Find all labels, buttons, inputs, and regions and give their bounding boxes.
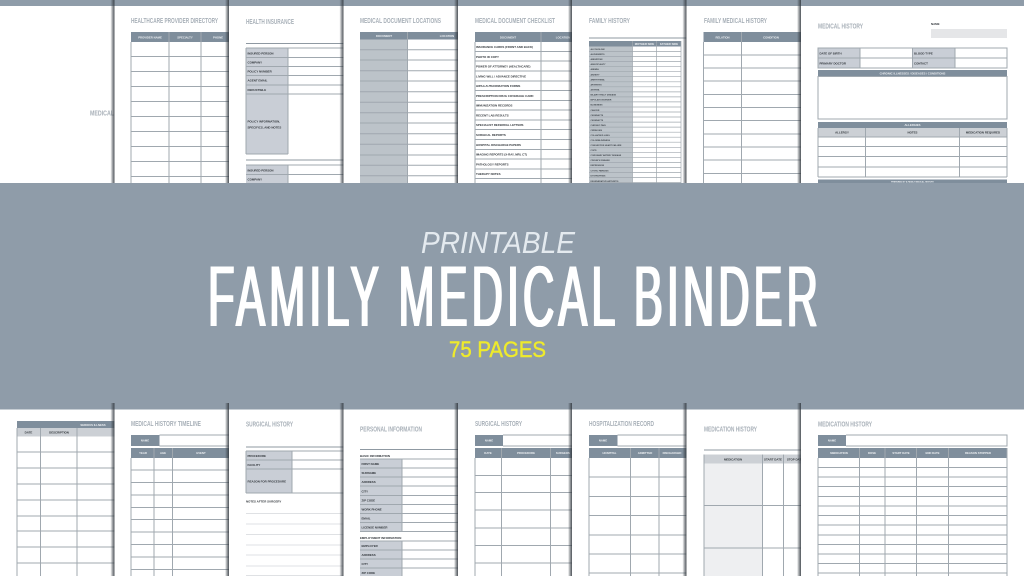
page: medical document checklist: SPECIALIST REFERRAL LETTERS <box>476 123 524 127</box>
page: medical document checklist: RECENT LAB RESULTS <box>476 114 509 118</box>
page: health insurance: COMPANY <box>248 178 262 182</box>
page: family history: CONGESTIVE HEART FAILURE <box>590 144 622 147</box>
page: family history: COPD <box>590 150 597 152</box>
page: health insurance: POLICY NUMBER <box>248 70 273 74</box>
page: personal information: FIRST NAME <box>362 462 379 466</box>
page: medical document checklist: IMAGING REPORTS (X-RAY, MRI, CT) <box>476 152 527 156</box>
page: personal information: LICENSE NUMBER <box>362 526 388 530</box>
page: family history: COLLAPSED LUNG <box>590 134 610 137</box>
page: personal information: BASIC INFORMATION <box>360 454 390 458</box>
page: medication history table: START DATE <box>892 451 910 455</box>
page: medical history form <box>801 6 1024 184</box>
page: family history: ANEMIA <box>590 68 599 71</box>
page: family history: FATHER SIDE <box>660 42 678 46</box>
main title: FAMILY MEDICAL BINDER <box>208 249 822 345</box>
page: medical history timeline: MEDICAL HISTORY TIMELINE <box>131 419 201 428</box>
page: health insurance: INSURED PERSON <box>248 168 274 172</box>
page: personal information: WORK PHONE <box>362 508 382 512</box>
page: medical document checklist: IMMUNIZATION RECORDS <box>476 104 512 108</box>
page: family history: ALCOHOLISM <box>590 48 605 51</box>
page: medical history form: CONTACT <box>914 62 928 66</box>
page: cover sheet top left <box>0 6 115 183</box>
page: surgical history table: DATE <box>484 451 492 455</box>
page: surgical history notes: SURGICAL HISTORY <box>246 420 293 428</box>
page: medical document locations: MEDICAL DOCUMENT LOCATIONS <box>360 16 441 25</box>
page: personal information: CITY <box>362 490 368 494</box>
page: medical document checklist: LIVING WILL / ADVANCE DIRECTIVE <box>476 74 526 78</box>
page: family history: FAMILY HISTORY <box>589 16 630 25</box>
page: medical history form: ALLERGIES <box>904 123 921 127</box>
page: medication history table: MEDICATION <box>830 451 848 455</box>
page: cover sheet top left: MEDICAL <box>90 108 114 118</box>
page: surgical history table: PROCEDURE <box>517 451 535 455</box>
page: medical history form: NOTES <box>908 130 918 134</box>
page: medication history table: REASON STOPPED <box>965 451 991 455</box>
page: medical history timeline <box>114 410 230 576</box>
page: medical document checklist: HOSPITAL DISCHARGE PAPERS <box>476 143 521 147</box>
page: family history: ANGIOPLASTY <box>590 63 606 66</box>
page: hospitalization record: HOSPITAL <box>603 451 617 455</box>
page: medication history notes: MEDICATION HISTORY <box>704 424 757 434</box>
page: medical document locations: DOCUMENT <box>376 34 392 38</box>
page: serious illness table: DESCRIPTION <box>49 430 69 434</box>
page: medication history table <box>801 410 1024 576</box>
page: family history: ANXIETY <box>590 74 600 76</box>
page: family medical history: CONDITION <box>763 35 779 39</box>
page: medical history form: NAME <box>931 22 940 26</box>
page: surgical history table: SURGEON <box>556 451 570 455</box>
page: healthcare provider directory: SPECIALTY <box>177 35 193 39</box>
page: surgical history table: NAME <box>485 438 493 442</box>
page: medical document checklist: PHOTO ID COPY <box>476 55 499 59</box>
page: family history: CATARACTS <box>590 119 604 122</box>
page: personal information: ADDRESS <box>362 553 376 557</box>
page: hospitalization record <box>572 410 687 576</box>
page: medical document checklist: LOCATION <box>556 35 570 39</box>
page: medical history form: DATE OF BIRTH <box>820 52 842 56</box>
page: personal information: EMAIL <box>362 516 371 520</box>
page: surgical history notes: NOTES AFTER SURGERY <box>246 500 281 504</box>
page: personal information: PERSONAL INFORMATION <box>360 424 422 434</box>
page: medical document locations <box>344 6 458 183</box>
page: health insurance <box>229 6 344 183</box>
page: family history: BILIARY TRACT DISEASE <box>590 94 617 96</box>
page: family history: MOTHER SIDE <box>635 42 654 46</box>
page: family history: DEPRESSION <box>590 165 605 167</box>
page: medical document checklist <box>458 6 573 183</box>
page: serious illness table: SERIOUS ILLNESS <box>80 423 106 427</box>
page: family history: BLINDNESS <box>590 104 603 106</box>
page: medical history form: BLOOD TYPE <box>914 52 933 56</box>
page: medical history form: MEDICAL HISTORY <box>818 22 863 30</box>
page count: 75 PAGES <box>449 337 546 362</box>
page: medical document checklist: SURGICAL REPORTS <box>476 133 506 137</box>
page: medical document checklist: THERAPY NOTES <box>476 172 501 176</box>
page: health insurance: COMPANY <box>248 60 262 64</box>
page: family medical history: RELATION <box>715 35 730 39</box>
page: medical document checklist: HIPAA AUTHORIZATION FORMS <box>476 84 520 88</box>
page: medical document locations: LOCATION <box>440 34 454 38</box>
page: family history: DYSTROPHIES <box>590 176 606 178</box>
page: medical history timeline: EVENT <box>196 451 206 455</box>
page: surgical history notes: FACILITY <box>248 463 260 467</box>
page: personal information: SURNAME <box>362 471 376 475</box>
page: medical history form: MEDICATION REQUIRED <box>966 130 1000 134</box>
page: family history: COLORBLINDNESS <box>590 140 611 142</box>
page: medication history notes: START DATE <box>764 458 782 462</box>
page: personal information: CITY <box>362 562 368 566</box>
page: personal information: ADDRESS <box>362 480 376 484</box>
page: family history: CHRONIC PAIN <box>590 124 606 127</box>
page: surgical history notes <box>229 410 344 576</box>
page: personal information: ZIP CODE <box>362 498 375 502</box>
page: health insurance: AGENT EMAIL <box>248 78 268 82</box>
page: medication history table: NAME <box>828 438 836 442</box>
page: medical document checklist: DOCUMENT <box>500 35 516 39</box>
page: medical history form: PRIMARY DOCTOR <box>820 62 847 66</box>
page: medical document checklist: POWER OF ATTORNEY (HEALTHCARE) <box>476 64 530 68</box>
page: medication history table: MEDICATION HISTORY <box>818 420 872 428</box>
page: medical history form: CHRONIC ILLNESSES / DISEASES / CONDITIONS <box>880 72 945 76</box>
page: medical document checklist: INSURANCE CARDS (FRONT AND BACK) <box>476 45 533 49</box>
page: personal information: EMPLOYER <box>362 544 379 548</box>
page: medical history form: PREPARED BY A FAMILY MEDICAL HISTORY <box>891 180 935 184</box>
page: surgical history table <box>458 410 573 576</box>
page: health insurance: DEDUCTIBLE <box>248 88 266 92</box>
page: medical document checklist: PATHOLOGY REPORTS <box>476 162 509 166</box>
page: medication history notes <box>686 410 803 576</box>
page: family history: ARRHYTHMIA <box>590 78 605 82</box>
page: medication history table: DOSE <box>868 451 876 455</box>
page: family history: BIPOLAR DISORDER <box>590 98 612 102</box>
page: health insurance: HEALTH INSURANCE <box>246 17 294 26</box>
page: serious illness table <box>0 410 115 576</box>
page: healthcare provider directory: PROVIDER NAME <box>138 35 162 39</box>
page: family history: DEGENERATIVE ARTHRITIS <box>590 180 619 183</box>
page: medical history form: ALLERGY <box>835 130 849 134</box>
subtitle: PRINTABLE <box>421 226 576 260</box>
page: family history: ANEURYSM <box>590 58 603 61</box>
page: family history: CORONARY ARTERY DISEASE <box>590 154 622 157</box>
page: health insurance: POLICY INFORMATION, <box>248 120 280 124</box>
page: family history <box>572 6 687 183</box>
page: family history: ASTHMA <box>590 88 600 92</box>
page: surgical history notes: PROCEDURE <box>248 454 266 458</box>
page: hospitalization record: ADMITTED <box>638 451 652 455</box>
page: medication history table: END DATE <box>925 451 940 455</box>
page: family history: CYSTIC FIBROSIS <box>590 170 609 172</box>
page: family history: CATARACTS <box>590 114 604 117</box>
page: healthcare provider directory: PHONE <box>213 35 223 39</box>
page: health insurance: SPECIFICS, AND NOTES <box>248 126 281 130</box>
page: family history: ALZHEIMER'S <box>590 53 605 56</box>
page: personal information <box>344 410 458 576</box>
page: healthcare provider directory <box>114 6 230 183</box>
page edge shadows <box>110 0 801 576</box>
page: health insurance: INSURED PERSON <box>248 52 274 56</box>
page: surgical history notes: REASON FOR PROCEDURE <box>248 480 286 484</box>
page: surgical history table: SURGICAL HISTORY <box>475 419 522 428</box>
page: family history: ARTHRITIS <box>590 84 602 86</box>
page: family medical history <box>686 6 802 183</box>
page: medical history timeline: AGE <box>160 451 166 455</box>
page: medical history timeline: YEAR <box>139 451 147 455</box>
page: healthcare provider directory: HEALTHCARE PROVIDER DIRECTORY <box>131 16 218 25</box>
page: medication history notes: STOP DATE <box>787 458 803 462</box>
page: medical document checklist: MEDICAL DOCUMENT CHECKLIST <box>475 16 555 25</box>
page: serious illness table: DATE <box>25 430 32 434</box>
page: medical history timeline: NAME <box>141 438 149 442</box>
page: medical document checklist: PRESCRIPTION DRUG COVERAGE CARD <box>476 94 534 98</box>
page: medication history notes: MEDICATION <box>724 458 742 462</box>
page: personal information: EMPLOYMENT INFORMATION <box>360 536 401 540</box>
page: family history: CIRRHOSIS <box>590 130 603 132</box>
page: family history: CROHN'S DISEASE <box>590 159 610 162</box>
page: hospitalization record: DISCHARGED <box>663 451 681 455</box>
page: hospitalization record: NAME <box>599 438 607 442</box>
page: family history: CANCER <box>590 109 600 112</box>
page: hospitalization record: HOSPITALIZATION RECORD <box>589 419 654 428</box>
page: family medical history: FAMILY MEDICAL HISTORY <box>704 16 767 25</box>
page: personal information: ZIP CODE <box>362 571 375 575</box>
